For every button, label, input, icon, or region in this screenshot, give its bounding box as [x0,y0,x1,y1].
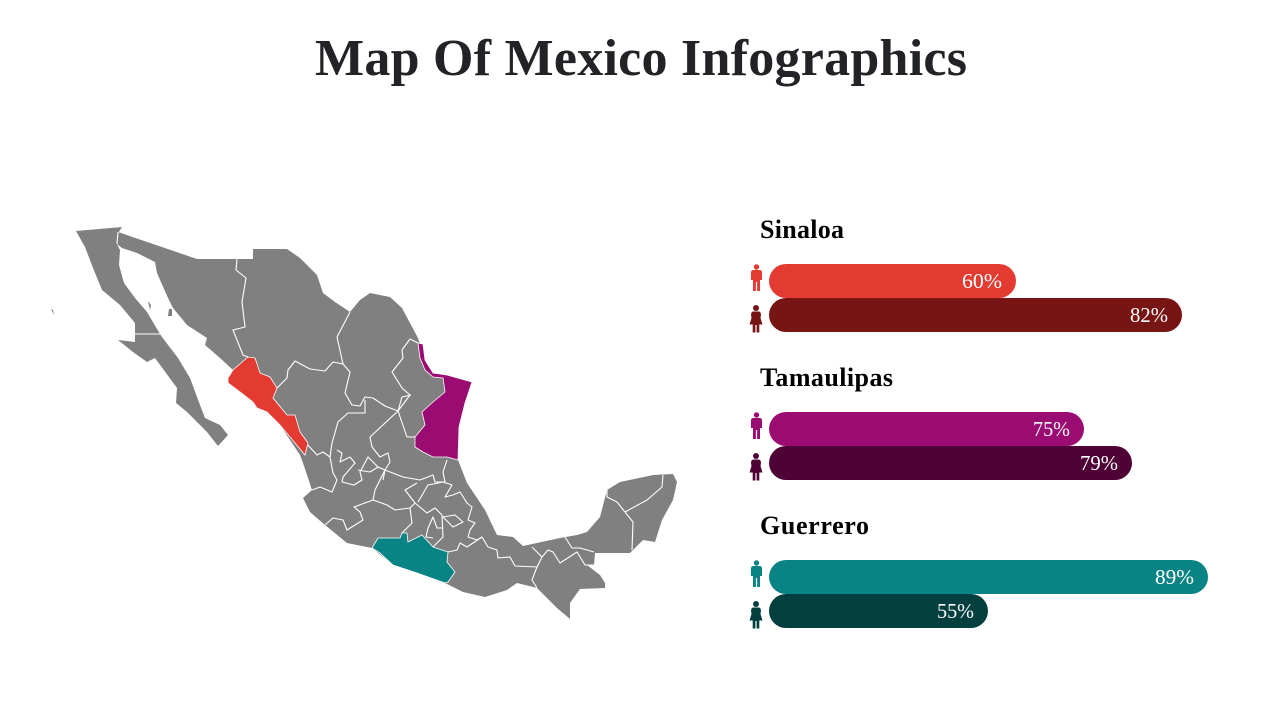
bar: 75% [769,412,1084,446]
heading: Guerrero [760,511,869,540]
panel: Tamaulipas [750,363,1132,480]
icon: woman [750,453,762,480]
value: 55%: 55% [937,599,974,623]
value: 82%: 82% [1130,303,1168,327]
icon: man [751,560,762,587]
icon: man [751,264,762,291]
bar: 55% [769,594,988,628]
map: Guerrero [372,533,455,583]
map: Tamaulipas [415,343,472,460]
map: islands [51,301,172,316]
value: 75%: 75% [1033,417,1070,441]
panel: Sinaloa [750,215,1182,332]
value: 60%: 60% [962,269,1002,293]
heading: Sinaloa [760,215,844,244]
map: Baja California peninsula [76,227,228,446]
value: 89%: 89% [1155,565,1194,589]
map: state borders [117,232,663,588]
bar: 89% [769,560,1208,594]
map: Sinaloa [228,357,308,455]
title: Map Of Mexico Infographics [315,30,967,87]
bar: 82% [769,298,1182,332]
map: mainland states [117,232,677,619]
icon: woman [750,305,762,332]
icon: man [751,412,762,439]
panel: Guerrero [750,511,1208,628]
heading: Tamaulipas [760,363,893,392]
icon: woman [750,601,762,628]
value: 79%: 79% [1080,451,1118,475]
bar: 79% [769,446,1132,480]
map of Mexico [51,227,677,619]
bar: 60% [769,264,1016,298]
